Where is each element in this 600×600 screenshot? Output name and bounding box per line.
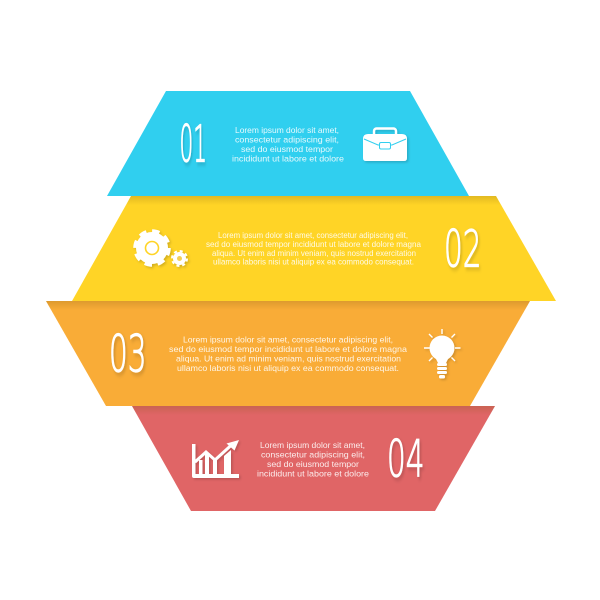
- text block 02: ullamco laboris nisi ut aliquip ex ea commodo consequat.: [213, 256, 414, 266]
- text block 04: incididunt ut labore et dolore: [257, 468, 369, 478]
- text block 02: sed do eiusmod tempor incididunt ut labore et dolore magna: [206, 239, 421, 249]
- text block 02: [206, 230, 421, 266]
- panel: band 03 orange: [46, 301, 530, 406]
- icon: light bulb: [424, 329, 460, 378]
- text block 04: Lorem ipsum dolor sit amet,: [260, 440, 365, 450]
- text block 01: incididunt ut labore et dolore: [232, 154, 344, 164]
- text block 04: sed do eiusmod tempor: [267, 459, 359, 469]
- icon: growth chart: [192, 440, 239, 478]
- icon: gears: [135, 231, 187, 266]
- text block 02: Lorem ipsum dolor sit amet, consectetur adipiscing elit,: [218, 230, 408, 240]
- number 03: 03: [109, 324, 146, 384]
- text block 01: consectetur adipiscing elit,: [235, 134, 339, 144]
- text block 03: ullamco laboris nisi ut aliquip ex ea commodo consequat.: [177, 363, 399, 373]
- text block 03: [169, 334, 407, 373]
- number 01: 01: [180, 116, 207, 175]
- panel: band 02 yellow: [72, 196, 556, 301]
- text block 04: [257, 440, 369, 478]
- text block 03: sed do eiusmod tempor incididunt ut labore et dolore magna: [169, 344, 407, 354]
- icon: briefcase: [363, 128, 407, 161]
- text block 03: Lorem ipsum dolor sit amet, consectetur adipiscing elit,: [183, 334, 393, 344]
- number 04: 04: [387, 429, 424, 489]
- panel: band 04 red: [132, 406, 495, 511]
- text block 03: aliqua. Ut enim ad minim veniam, quis nostrud exercitation: [176, 354, 401, 364]
- text block 01: [232, 125, 344, 164]
- text block 01: Lorem ipsum dolor sit amet,: [235, 125, 339, 135]
- number 02: 02: [444, 219, 481, 279]
- panel: band 01 blue: [107, 91, 469, 196]
- text block 01: sed do eiusmod tempor: [241, 144, 333, 154]
- text block 04: consectetur adipiscing elit,: [261, 450, 365, 460]
- text block 02: aliqua. Ut enim ad minim veniam, quis nostrud exercitation: [212, 248, 416, 258]
